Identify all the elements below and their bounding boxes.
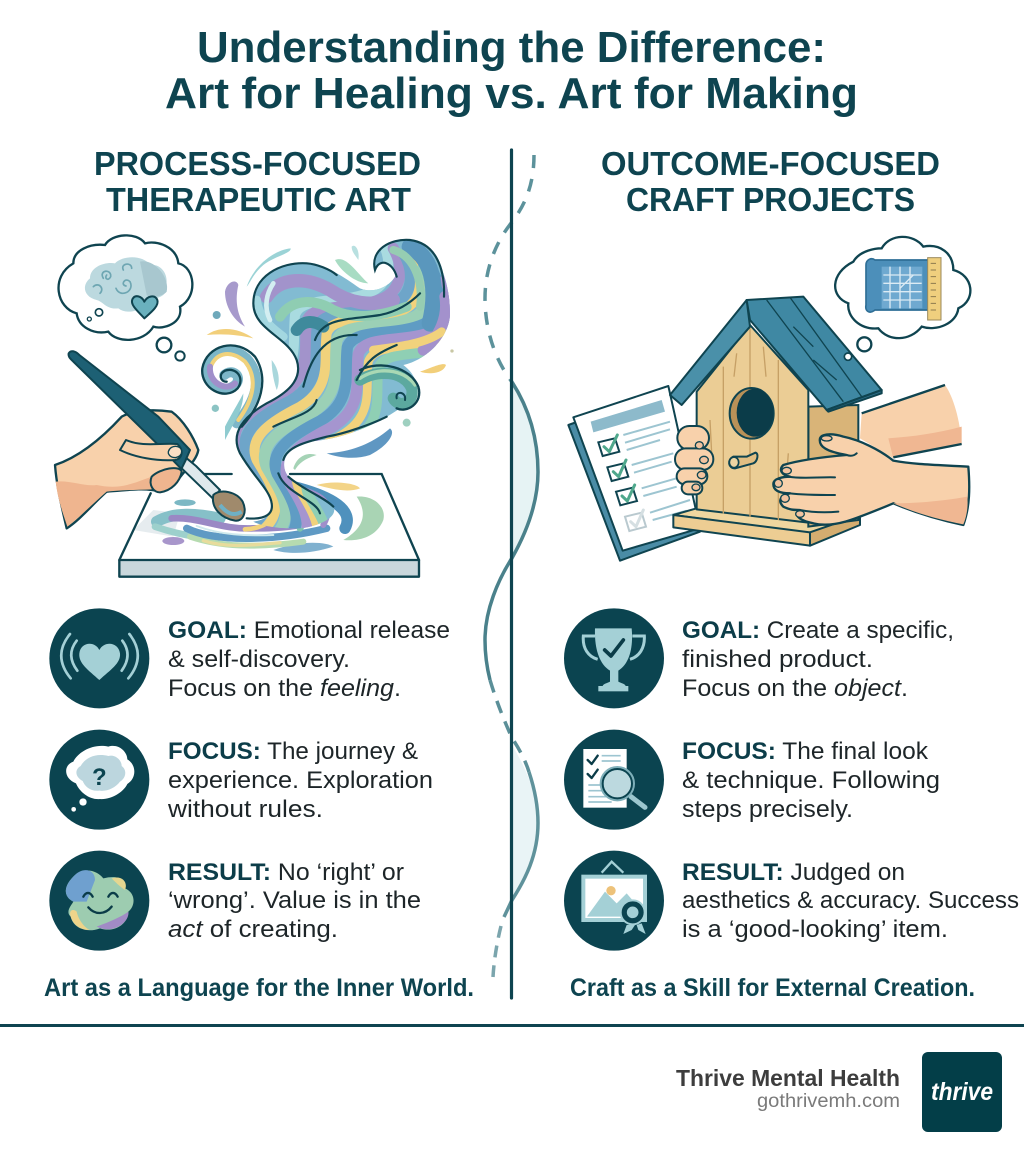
left tagline: Art as a Language for the Inner World.: [44, 974, 474, 1002]
left text: goal: [168, 617, 450, 702]
right text: goal: GOAL: Create a specific,: [682, 617, 954, 644]
right hand and arm: [773, 434, 969, 525]
birdhouse front: [697, 325, 808, 523]
left hand fingers: [675, 426, 713, 494]
paintbrush: [69, 351, 245, 521]
hand holding brush: [55, 410, 198, 528]
left text: result: RESULT: No ‘right’ or: [168, 859, 404, 886]
left text: goal: & self-discovery.: [168, 646, 350, 673]
thumb and fingers: [120, 440, 182, 492]
left text: result: ‘wrong’. Value is in the: [168, 887, 421, 914]
right text: result: RESULT: Judged on: [682, 859, 905, 886]
icon: heart with waves: [49, 608, 149, 708]
right curl: [360, 365, 419, 410]
right text: focus: steps precisely.: [682, 796, 853, 823]
swirling paint ribbon: [201, 238, 450, 528]
checklist clipboard: [568, 386, 700, 561]
left curl: [202, 345, 262, 427]
left text: focus: without rules.: [167, 796, 323, 823]
right text: result: aesthetics & accuracy. Success: [682, 887, 1019, 914]
icon: smiling paint blob: [49, 851, 149, 951]
left icon circles: [49, 608, 149, 951]
right text: goal: finished product.: [682, 646, 873, 673]
right text: goal: Focus on the object.: [682, 675, 908, 702]
right text: focus: FOCUS: The final look: [682, 738, 929, 765]
footer brand text: [676, 1065, 900, 1112]
right text: result: [682, 859, 1019, 943]
left heading: [94, 145, 421, 218]
far arm: [860, 385, 962, 458]
illustration: painting hand with flowing paint: [55, 233, 472, 577]
footer rule: [0, 1024, 1024, 1027]
icon: trophy: [564, 608, 664, 708]
footer brand text: Thrive Mental Health: [676, 1065, 900, 1091]
footer logo: [922, 1052, 1002, 1132]
thought bubble: blueprint: [835, 237, 970, 360]
left heading: PROCESS-FOCUSED: [94, 145, 421, 182]
right heading: CRAFT PROJECTS: [626, 181, 915, 218]
left text: focus: experience. Exploration: [168, 767, 433, 794]
footer brand text: gothrivemh.com: [757, 1091, 900, 1112]
footer logo: thrive: [931, 1078, 993, 1106]
ribbon ink outlines: [237, 240, 444, 519]
illustration: hands holding birdhouse with checklist: [568, 237, 970, 561]
left heading: THERAPEUTIC ART: [106, 181, 411, 218]
right heading: [601, 145, 940, 218]
canvas board: [119, 454, 419, 577]
title: Understanding the Difference:: [197, 23, 826, 72]
right tagline: Craft as a Skill for External Creation.: [570, 974, 975, 1002]
paint splashes: [207, 246, 454, 458]
birdhouse side: [808, 405, 858, 527]
title: [165, 23, 858, 118]
thought bubble: mind and heart: [59, 235, 192, 361]
left text: focus: FOCUS: The journey &: [168, 738, 418, 765]
paint puddle on canvas: [155, 480, 347, 546]
title: Art for Healing vs. Art for Making: [165, 69, 858, 118]
left text: focus: [167, 738, 433, 823]
birdhouse roof: [670, 297, 882, 412]
right icon circles: [564, 608, 664, 951]
left text: result: act of creating.: [168, 916, 338, 943]
right text: focus: [682, 738, 940, 823]
birdhouse base: [673, 508, 860, 546]
icon: framed picture with ribbon: [564, 851, 664, 951]
icon: thought cloud with question mark: ?: [92, 764, 107, 791]
center divider with wave: [485, 150, 538, 998]
right text: focus: & technique. Following: [682, 767, 940, 794]
right text: result: is a ‘good-looking’ item.: [682, 916, 948, 943]
icon: thought cloud with question mark: [49, 730, 149, 830]
left text: goal: Focus on the feeling.: [168, 675, 401, 702]
icon: checklist with magnifier: [564, 730, 664, 830]
left text: result: [168, 859, 421, 943]
right text: goal: [682, 617, 954, 702]
left text: goal: GOAL: Emotional release: [168, 617, 450, 644]
right heading: OUTCOME-FOCUSED: [601, 145, 940, 182]
